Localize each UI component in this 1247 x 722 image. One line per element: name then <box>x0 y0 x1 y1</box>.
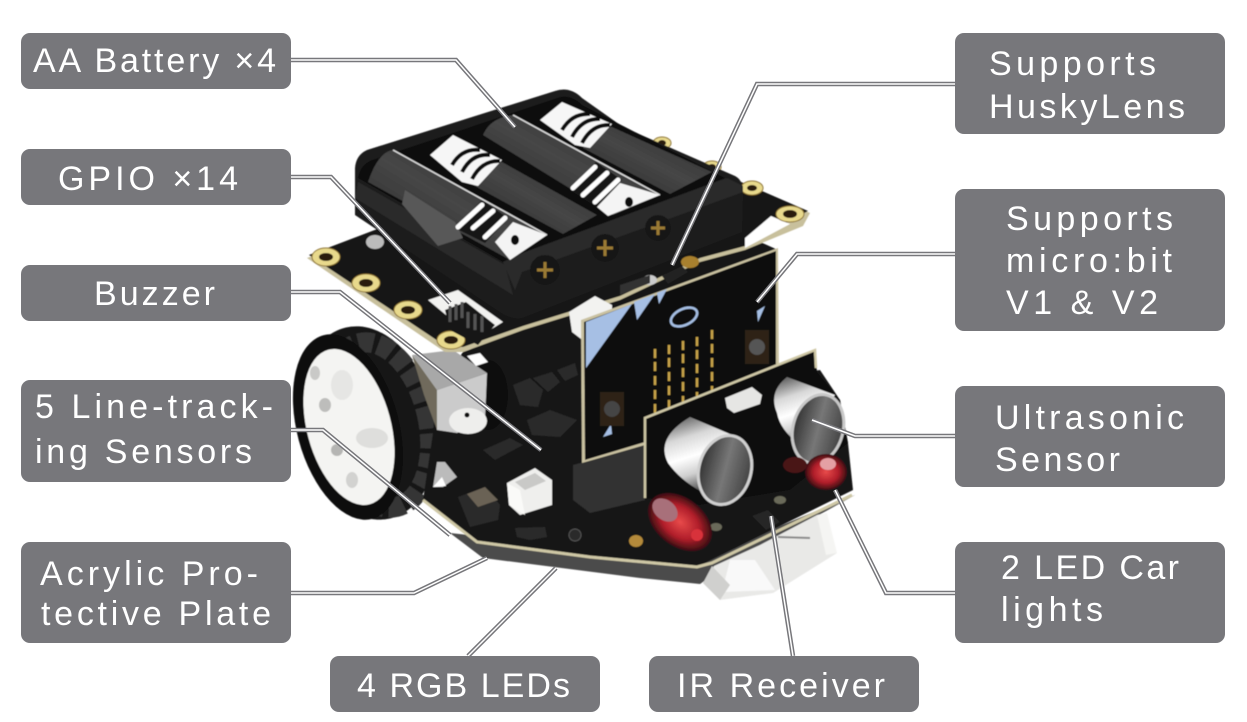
label: GPIO <box>21 149 291 205</box>
battery cover 2 <box>483 115 660 216</box>
ultrasonic sensor <box>645 350 851 511</box>
label: micro:bit <box>955 189 1225 331</box>
upper plate <box>307 137 810 352</box>
label: HuskyLens: HuskyLens <box>989 88 1185 126</box>
mounting holes <box>312 137 804 349</box>
label: micro:bit: Supports <box>1006 200 1173 238</box>
label: micro:bit: V1 & V2 <box>1006 284 1158 322</box>
micro:bit board <box>581 248 779 463</box>
cylinder 1 and coil <box>430 135 597 234</box>
label: HuskyLens: Supports <box>989 45 1156 83</box>
red LED right <box>783 454 847 490</box>
label: Acrylic plate: tective Plate <box>41 595 271 633</box>
label: Acrylic plate <box>21 542 291 643</box>
motor <box>412 350 508 434</box>
top connector <box>569 256 699 342</box>
front transducer <box>664 417 759 511</box>
battery holder <box>355 90 743 318</box>
label: IR Receiver <box>649 656 919 712</box>
robot car <box>274 90 855 600</box>
label: Line-tracking sensors: ing Sensors <box>35 433 252 471</box>
label: micro:bit: micro:bit <box>1006 242 1173 280</box>
LED matrix <box>655 330 712 413</box>
label: Line-tracking sensors <box>21 380 291 482</box>
label: RGB LEDs: 4 RGB LEDs <box>357 667 570 705</box>
label: GPIO: GPIO ×14 <box>58 160 238 198</box>
label: HuskyLens <box>955 33 1225 134</box>
white stripes <box>458 167 618 237</box>
label: Ultrasonic: Ultrasonic <box>995 399 1184 437</box>
red LED left <box>637 481 723 563</box>
wheel <box>274 312 455 534</box>
main chassis <box>412 235 855 584</box>
label: RGB LEDs <box>330 656 600 712</box>
buttons <box>745 330 769 364</box>
label: AA Battery: AA Battery ×4 <box>33 42 276 80</box>
label: Acrylic plate: Acrylic Pro- <box>40 555 258 593</box>
label: Buzzer <box>21 265 291 321</box>
white connector <box>507 468 552 515</box>
leader lines <box>291 60 955 656</box>
label: AA Battery <box>21 33 291 89</box>
label: IR Receiver: IR Receiver <box>677 667 885 705</box>
label: LED car lights: lights <box>1001 591 1103 629</box>
label: Buzzer: Buzzer <box>94 275 215 313</box>
IR sensor chip <box>752 510 780 530</box>
GPIO pins <box>428 290 503 345</box>
label: Ultrasonic: Sensor <box>995 441 1120 479</box>
body components <box>458 363 578 540</box>
label: Line-tracking sensors: 5 Line-track- <box>35 388 273 426</box>
cylinder 2 and coil <box>540 102 712 194</box>
IR receiver and caster <box>703 513 837 600</box>
battery cover 1 <box>368 150 547 260</box>
screws <box>530 215 671 285</box>
label: LED car lights: 2 LED Car <box>1001 549 1179 587</box>
label: LED car lights <box>955 542 1225 643</box>
label: Ultrasonic <box>955 386 1225 487</box>
micro:bit edge connector <box>573 445 645 513</box>
rear transducer <box>774 377 851 469</box>
